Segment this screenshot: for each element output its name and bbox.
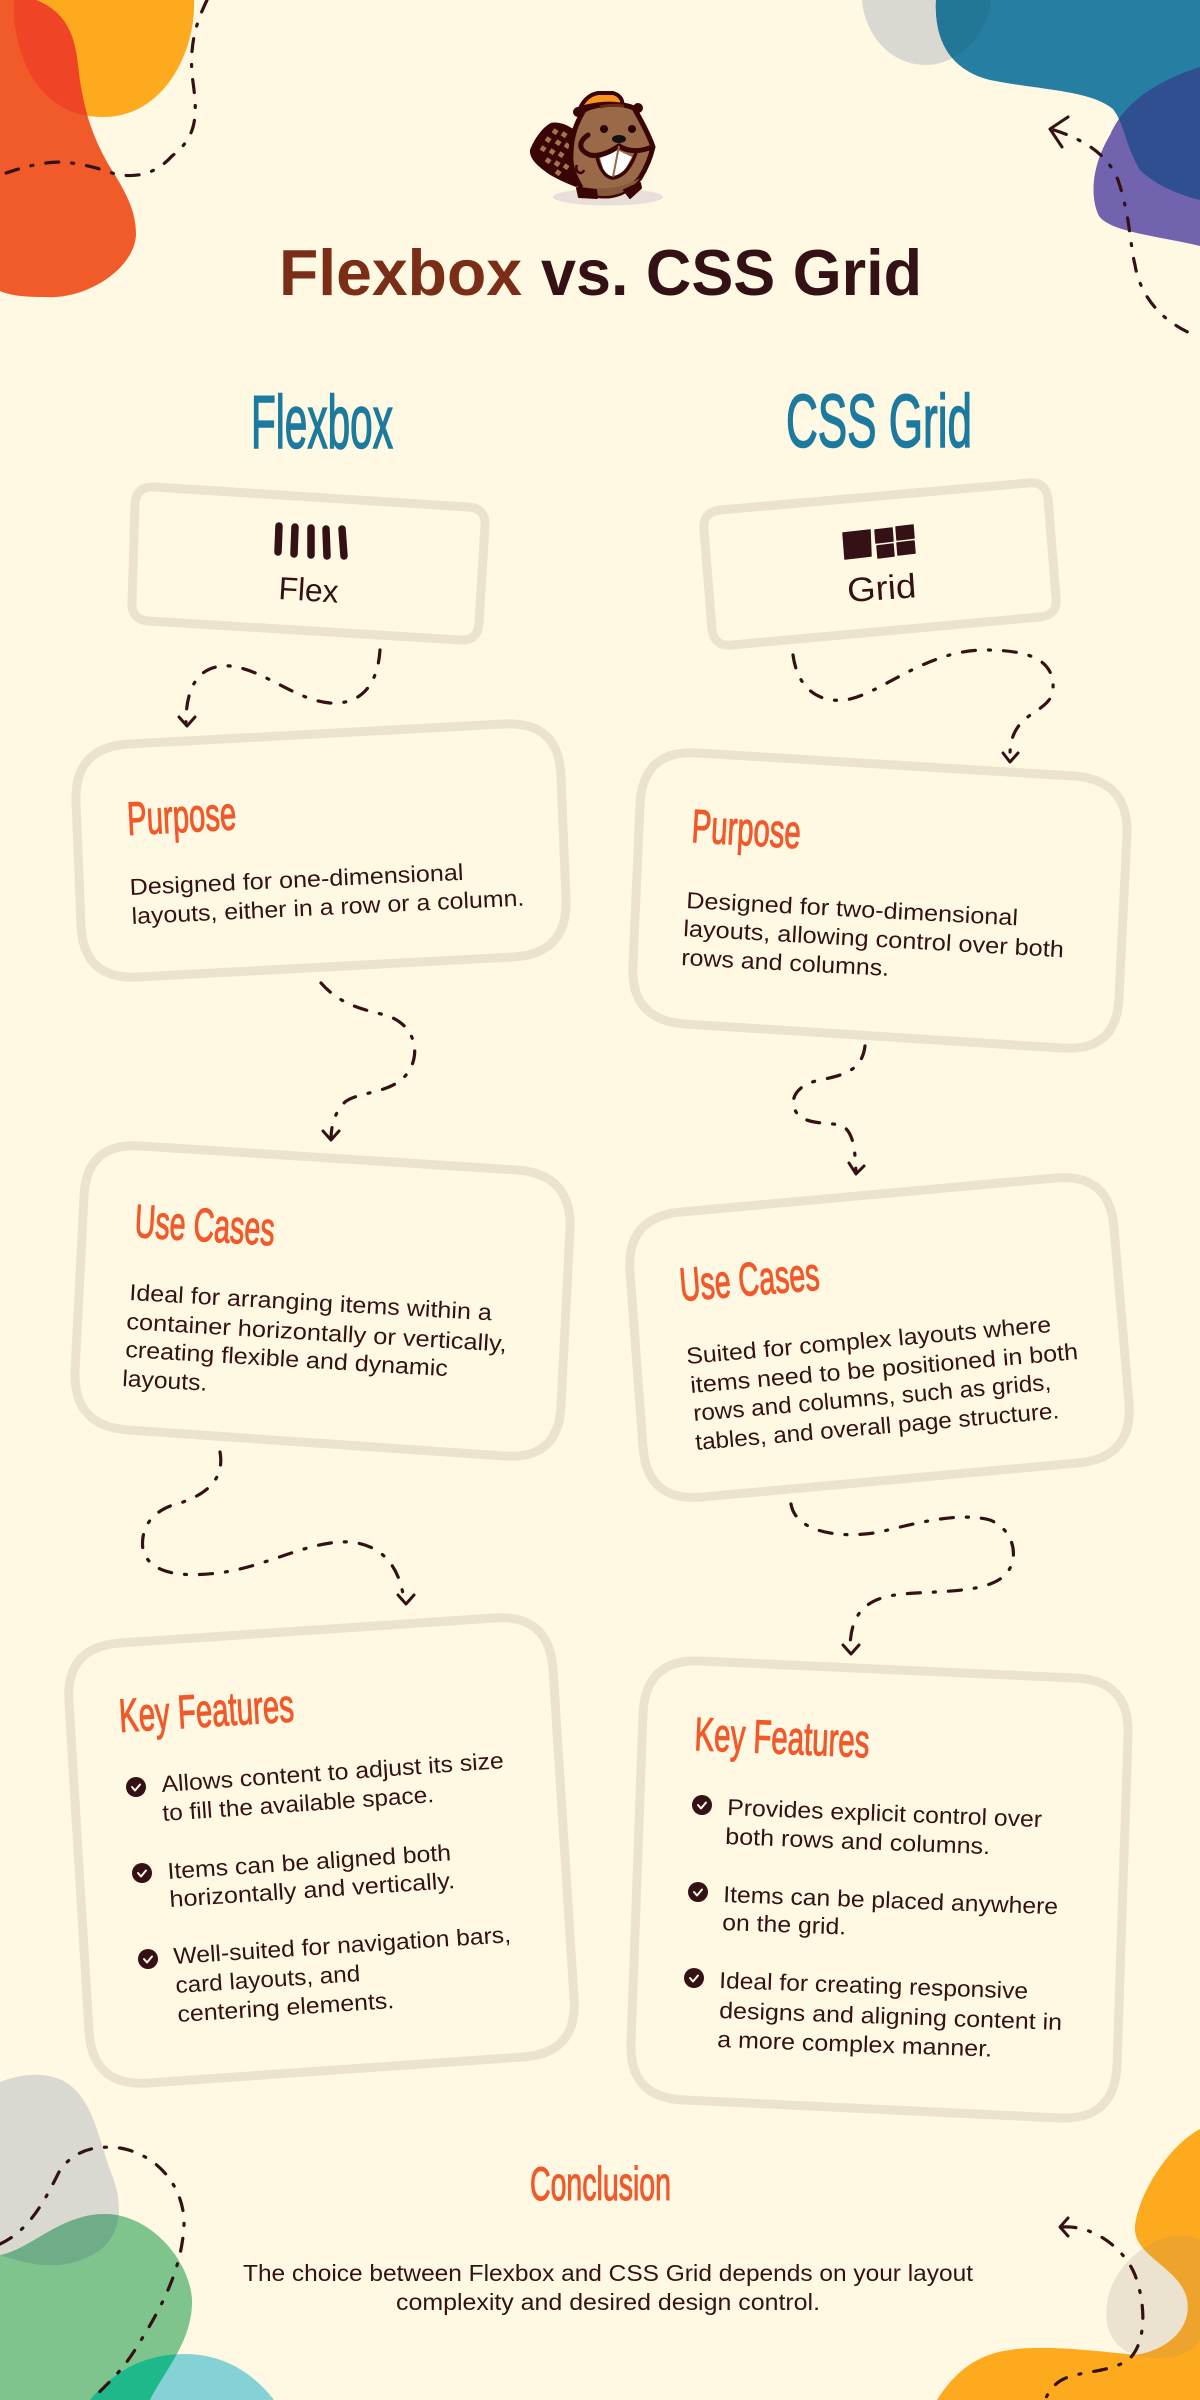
decorative blobs: bottom left (0, 2075, 274, 2400)
list item 1: Allows content to adjust its size (161, 1747, 505, 1797)
icon: flex bars (278, 526, 344, 556)
heading: Purpose: Purpose (690, 799, 802, 858)
label: Grid: Grid (846, 567, 917, 610)
list item 3 (684, 1967, 1063, 2062)
decorative blobs: top left (0, 0, 207, 297)
title (279, 236, 922, 309)
body text: tables, and overall page structure. (694, 1397, 1060, 1455)
icon: beaver mascot (531, 93, 663, 206)
conclusion text: complexity and desired design control. (396, 2289, 820, 2315)
list item 2: on the grid. (722, 1909, 847, 1940)
list item 2: Items can be aligned both (167, 1839, 452, 1884)
list item 3: a more complex manner. (717, 2026, 993, 2062)
list item 1: to fill the available space. (162, 1781, 435, 1826)
body text (129, 859, 525, 929)
body text: container horizontally or vertically, (126, 1308, 508, 1357)
list item 1: Provides explicit control over (727, 1794, 1043, 1832)
heading: Key Features: Key Features (117, 1678, 295, 1742)
list item 2: Items can be placed anywhere (723, 1881, 1059, 1919)
panel: grid use cases (630, 1178, 1129, 1497)
panel: grid key features (631, 1661, 1128, 2118)
list item 3: Ideal for creating responsive (719, 1967, 1029, 2004)
list item 3: designs and aligning content in (719, 1997, 1063, 2035)
body text: layouts, allowing control over both (683, 915, 1065, 962)
body text: rows and columns, such as grids, (692, 1369, 1052, 1426)
body text: Designed for two-dimensional (686, 887, 1019, 930)
list item 1 (126, 1747, 505, 1826)
panel: flex tag (132, 487, 485, 640)
list item 2 (132, 1839, 456, 1912)
label: Flex: Flex (278, 570, 340, 610)
list item 2 (688, 1881, 1059, 1940)
body text: Ideal for arranging items within a (129, 1279, 493, 1325)
body text (122, 1279, 508, 1396)
arrow: flexbox purpose to use cases (321, 983, 415, 1140)
panel: grid purpose (633, 753, 1127, 1048)
list item 3: card layouts, and (175, 1960, 361, 1998)
list item 3 (138, 1921, 512, 2027)
column heading: CSS Grid: CSS Grid (786, 379, 972, 463)
icon: grid cells (843, 525, 915, 559)
column heading: Flexbox: Flexbox (251, 380, 393, 464)
heading: Conclusion: Conclusion (530, 2157, 671, 2210)
body text (685, 1311, 1079, 1455)
arrow: grid purpose to use cases (793, 1046, 865, 1174)
list item 2: horizontally and vertically. (169, 1867, 456, 1912)
panel: grid tag (704, 483, 1056, 645)
body text: items need to be positioned in both (689, 1338, 1079, 1398)
panel: flexbox key features (69, 1618, 574, 2083)
heading: Use Cases: Use Cases (677, 1247, 821, 1311)
body text (681, 887, 1065, 981)
heading: Use Cases: Use Cases (133, 1194, 276, 1255)
arrow: grid tag to purpose (793, 650, 1053, 762)
conclusion text (243, 2260, 974, 2315)
decorative blobs: top right (862, 0, 1200, 334)
body text: layouts, either in a row or a column. (131, 885, 525, 929)
arrow: grid use cases to key features (791, 1504, 1013, 1654)
decorative blobs: bottom right (937, 2129, 1200, 2400)
body text: rows and columns. (681, 944, 890, 981)
arrow: flexbox use cases to key features (142, 1452, 414, 1604)
conclusion text: The choice between Flexbox and CSS Grid depends on your layout (243, 2260, 974, 2286)
list item 1 (692, 1794, 1043, 1859)
body text: layouts. (122, 1365, 208, 1396)
heading: Key Features: Key Features (694, 1707, 871, 1767)
body text: Suited for complex layouts where (685, 1311, 1052, 1369)
body text: creating flexible and dynamic (125, 1336, 449, 1381)
heading: Purpose: Purpose (126, 786, 237, 845)
list item 3: centering elements. (177, 1987, 395, 2027)
list item 1: both rows and columns. (725, 1823, 991, 1859)
title: vs. CSS Grid (541, 236, 922, 309)
panel: flexbox purpose (76, 724, 566, 977)
arrow: flex tag to purpose (179, 650, 380, 726)
body text: Designed for one-dimensional (129, 859, 464, 900)
title: Flexbox (279, 236, 522, 309)
panel: flexbox use cases (75, 1146, 570, 1456)
list item 3: Well-suited for navigation bars, (173, 1921, 512, 1969)
